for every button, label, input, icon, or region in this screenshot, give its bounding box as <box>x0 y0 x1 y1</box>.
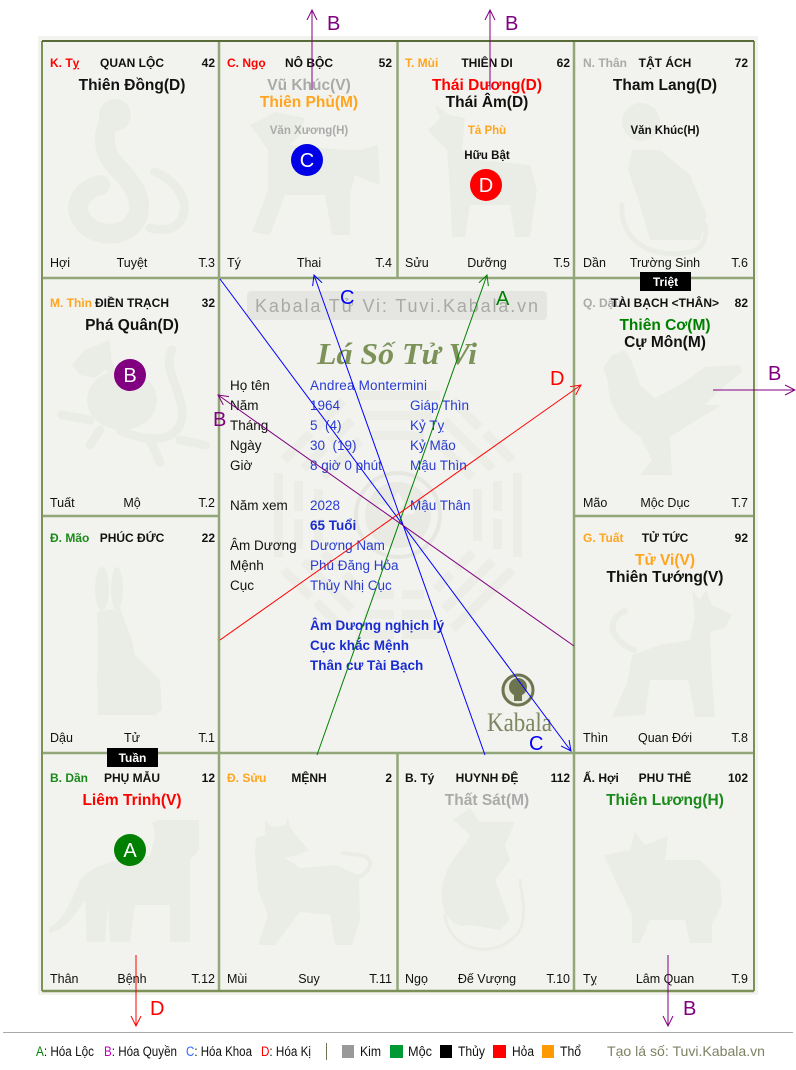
footer divider <box>3 1032 793 1033</box>
icon: horse <box>250 112 380 235</box>
panel: personal information: Ngày <box>230 438 262 453</box>
banner: site name: Kabala Tử Vi: Tuvi.Kabala.vn <box>255 296 538 316</box>
palace: Thiên Di: Tả Phù <box>468 125 506 137</box>
palace: Tài Bạch: 82 <box>735 296 748 310</box>
palace: Tật Ách: TẬT ÁCH <box>639 55 691 70</box>
icon: rat <box>442 808 524 949</box>
palace: Điền Trạch: M. Thìn <box>50 296 92 310</box>
palace: Phúc Đức: Dậu <box>50 731 73 745</box>
letter B: B <box>213 409 226 431</box>
palace: Tật Ách: T.6 <box>731 256 748 270</box>
palace: Tử Tức: Quan Đới <box>638 731 692 745</box>
panel: personal information: Cục <box>230 578 254 593</box>
palace: Phụ Mẫu: PHỤ MẪU <box>104 770 160 785</box>
palace: Quan Lộc: T.3 <box>198 256 215 270</box>
arrow: B top left <box>311 10 313 90</box>
palace: Huynh Đệ <box>405 770 570 986</box>
palace: Thiên Di: Hữu Bật <box>464 150 510 162</box>
palace: Huynh Đệ: T.10 <box>546 972 570 986</box>
arrow letters <box>150 13 781 1020</box>
palace: Huynh Đệ: B. Tý <box>405 771 435 785</box>
palace: Phụ Mẫu: T.12 <box>191 972 215 986</box>
palace: Nô Bộc: Vũ Khúc(V) <box>267 77 351 94</box>
panel: personal information: 65 Tuổi <box>310 518 356 533</box>
panel: personal information: Thân cư Tài Bạch <box>310 658 423 673</box>
palace: Tử Tức: 92 <box>735 531 748 545</box>
palace: Nô Bộc: NÔ BỘC <box>285 55 333 70</box>
palace: Phụ Mẫu: B. Dần <box>50 771 88 785</box>
palace: Nô Bộc: Thiên Phủ(M) <box>260 94 358 111</box>
marker: D: D <box>479 175 493 197</box>
title: Lá Số Tử Vi: Lá Số Tử Vi <box>316 336 477 371</box>
icon: rooster <box>603 350 742 475</box>
panel: personal information: Tháng <box>230 418 268 433</box>
palace: Phúc Đức: T.1 <box>198 731 215 745</box>
panel: personal information: 30 (19) <box>310 438 357 453</box>
chart grid <box>42 41 754 991</box>
palace: Nô Bộc: T.4 <box>375 256 392 270</box>
palace: Mệnh: T.11 <box>369 972 392 986</box>
icon: bagua watermark <box>274 391 522 639</box>
legend: transformations: B: Hóa Quyền <box>104 1044 177 1059</box>
panel: personal information: Âm Dương nghịch lý <box>310 618 445 633</box>
panel: personal information: Mậu Thìn <box>410 458 467 473</box>
panel: personal information: Phú Đăng Hỏa <box>310 558 399 573</box>
palace: Tài Bạch: Mộc Dục <box>640 496 690 510</box>
letter D: D <box>150 998 164 1020</box>
footer link text: Tạo lá số: Tuvi.Kabala.vn <box>607 1043 765 1059</box>
panel: personal information <box>230 378 471 673</box>
letter D: D <box>550 368 564 390</box>
panel: personal information: Dương Nam <box>310 538 385 553</box>
palace: Tật Ách: Dần <box>583 256 606 270</box>
palace: Phu Thê: T.9 <box>731 972 748 986</box>
panel: personal information: Mậu Thân <box>410 498 471 513</box>
marker: A <box>114 834 146 866</box>
palace: Tử Tức: Thiên Tướng(V) <box>607 569 723 586</box>
panel: personal information: Kỷ Tỵ <box>410 418 445 433</box>
palace: Phụ Mẫu: Thân <box>50 972 79 986</box>
palace: Điền Trạch: Phá Quân(D) <box>85 317 179 334</box>
palace: Quan Lộc: K. Tỵ <box>50 56 80 70</box>
palace: Phúc Đức: 22 <box>202 531 215 545</box>
palace: Tật Ách: N. Thân <box>583 56 627 70</box>
icon: pig <box>604 832 722 943</box>
letter C: C <box>340 287 354 309</box>
palace: Phụ Mẫu: 12 <box>202 771 215 785</box>
marker: A: A <box>123 840 137 862</box>
letter B: B <box>768 363 781 385</box>
palace: Điền Trạch <box>50 295 215 510</box>
palace: Tật Ách: 72 <box>735 56 748 70</box>
panel: personal information: 2028 <box>310 498 340 513</box>
palace: Nô Bộc: Văn Xương(H) <box>270 125 348 137</box>
palace: Thiên Di: Sửu <box>405 256 429 270</box>
palace: Nô Bộc: Thai <box>297 256 321 270</box>
legend separator <box>326 1043 327 1060</box>
badge: Triệt <box>640 272 691 291</box>
palace: Thiên Di: 62 <box>557 56 570 70</box>
marker: B: B <box>123 365 137 387</box>
panel: personal information: Năm xem <box>230 498 288 513</box>
palace: Huynh Đệ: 112 <box>551 771 570 785</box>
panel: personal information: Giờ <box>230 458 252 473</box>
arrow: A <box>317 275 487 755</box>
palace: Mệnh <box>227 770 392 986</box>
badge: Tuần: Tuần <box>119 751 146 765</box>
palace: Quan Lộc: Tuyệt <box>117 256 148 270</box>
letter B: B <box>327 13 340 35</box>
legend: transformations: C: Hóa Khoa <box>186 1044 252 1059</box>
arrow: B diagonal <box>218 395 574 646</box>
palace: Mệnh: MỆNH <box>291 770 327 785</box>
icon: ox <box>255 817 370 945</box>
legend: elements: Thổ <box>560 1044 581 1059</box>
marker: D <box>470 169 502 201</box>
palace: Tài Bạch: Mão <box>583 496 607 510</box>
badge: Tuần <box>107 748 158 767</box>
palace: Thiên Di: Thái Dương(D) <box>432 77 542 94</box>
palace: Phu Thê: Ấ. Hợi <box>583 770 619 785</box>
icon: monkey <box>622 103 707 254</box>
palace: Điền Trạch: Mộ <box>123 496 141 510</box>
palace: Huynh Đệ: Thất Sát(M) <box>445 792 529 809</box>
palace: Tử Tức <box>583 530 748 745</box>
palace: Nô Bộc: 52 <box>379 56 392 70</box>
panel: personal information: 1964 <box>310 398 341 413</box>
palace: Phụ Mẫu: Liêm Trinh(V) <box>82 792 182 809</box>
panel: personal information: Thủy Nhị Cục <box>310 578 392 593</box>
arrow: D <box>220 385 581 640</box>
arrow: B top right <box>489 10 491 90</box>
palace: Nô Bộc: Tý <box>227 256 242 270</box>
palace: Quan Lộc: Hợi <box>50 256 70 270</box>
arrow: D bottom <box>135 955 137 1026</box>
palace: Tử Tức: Thìn <box>583 731 608 745</box>
palace: Tài Bạch: Thiên Cơ(M) <box>619 317 711 334</box>
panel: personal information: Mệnh <box>230 558 264 573</box>
panel: personal information: Giáp Thìn <box>410 398 469 413</box>
palace: Phụ Mẫu <box>50 770 215 986</box>
legend: transformations <box>36 1044 311 1059</box>
marker: B <box>114 359 146 391</box>
banner: site name <box>247 291 547 320</box>
palace: Tài Bạch: Q. Dậu <box>583 296 622 310</box>
palace: Tài Bạch: TÀI BẠCH <THÂN> <box>611 295 719 310</box>
icon: rabbit <box>95 567 162 715</box>
palace: Quan Lộc: QUAN LỘC <box>100 55 164 70</box>
panel: personal information: Họ tên <box>230 378 270 393</box>
panel: personal information: Âm Dương <box>230 538 297 553</box>
letter B: B <box>683 998 696 1020</box>
palace: Tử Tức: Tử Vi(V) <box>635 552 695 569</box>
palace: Phúc Đức <box>50 530 215 745</box>
palace: Tài Bạch: Cự Môn(M) <box>624 334 706 351</box>
palace: Phúc Đức: PHÚC ĐỨC <box>100 530 165 545</box>
palace: Thiên Di: T.5 <box>553 256 570 270</box>
palace: Điền Trạch: T.2 <box>198 496 215 510</box>
icon: dog <box>612 590 732 717</box>
arrow: C diagonal <box>220 279 571 751</box>
palace: Phu Thê: 102 <box>728 771 748 785</box>
arrows: star transformations <box>136 10 795 1026</box>
panel: personal information: Andrea Montermini <box>310 378 427 393</box>
panel: personal information: Cục khắc Mệnh <box>310 638 409 653</box>
palace: Phu Thê: Thiên Lương(H) <box>606 792 724 809</box>
palace: Điền Trạch: Tuất <box>50 496 75 510</box>
panel: personal information: Kỷ Mão <box>410 438 456 453</box>
palace: Quan Lộc <box>50 55 215 270</box>
palace: Phụ Mẫu: Bệnh <box>117 972 147 986</box>
palace: Tử Tức: TỬ TỨC <box>642 530 689 545</box>
palace: Điền Trạch: ĐIỀN TRẠCH <box>95 295 169 310</box>
palace: Tử Tức: T.8 <box>731 731 748 745</box>
marker: C <box>291 144 323 176</box>
arrow: B bottom <box>667 955 669 1026</box>
palace: Phu Thê: Tỵ <box>583 972 598 986</box>
palace: Tật Ách: Tham Lang(D) <box>613 77 717 94</box>
legend: elements: Hỏa <box>512 1044 534 1059</box>
letter C: C <box>529 733 543 755</box>
grid lines <box>42 41 754 991</box>
palace: Thiên Di <box>405 55 570 270</box>
palace: Tài Bạch <box>583 295 748 510</box>
palace: Quan Lộc: 42 <box>202 56 215 70</box>
palace: Huynh Đệ: Ngọ <box>405 972 428 986</box>
palace: Tử Tức: G. Tuất <box>583 531 623 545</box>
palace: Nô Bộc <box>227 55 392 270</box>
palace: Điền Trạch: 32 <box>202 296 215 310</box>
palace: Mệnh: Đ. Sửu <box>227 771 266 785</box>
palace: Phu Thê: PHU THÊ <box>639 770 691 785</box>
badge: Triệt: Triệt <box>653 275 678 289</box>
palace: Quan Lộc: Thiên Đồng(D) <box>79 77 185 94</box>
palace: Thiên Di: THIÊN DI <box>461 55 513 70</box>
palace: Mệnh: Mùi <box>227 972 247 986</box>
icon: tiger <box>49 820 199 942</box>
legend: elements: Thủy <box>458 1044 485 1059</box>
palace: Huynh Đệ: Đế Vượng <box>458 972 516 986</box>
icon: dragon <box>62 340 205 462</box>
panel: personal information: 5 (4) <box>310 418 342 433</box>
letter A: A <box>496 288 510 310</box>
panel: personal information: Năm <box>230 398 259 413</box>
palace: Tật Ách <box>583 55 748 270</box>
palace: Nô Bộc: C. Ngọ <box>227 56 266 70</box>
palace: Huynh Đệ: HUYNH ĐỆ <box>456 770 518 785</box>
palace: Thiên Di: Thái Âm(D) <box>446 93 528 111</box>
palace: Phu Thê <box>583 770 748 986</box>
legend: transformations: A: Hóa Lộc <box>36 1044 94 1059</box>
legend: elements: Kim <box>360 1044 381 1059</box>
logo: Kabala: Kabala <box>487 708 552 737</box>
palace: Mệnh: Suy <box>298 972 321 986</box>
palace: Thiên Di: Dưỡng <box>467 256 507 270</box>
legend: elements <box>342 1044 581 1059</box>
arrow: B right <box>713 389 795 391</box>
zodiac watermarks <box>49 99 742 949</box>
arrow: C <box>314 275 485 755</box>
legend: transformations: D: Hóa Kị <box>261 1044 311 1059</box>
legend: elements: Mộc <box>408 1044 432 1059</box>
palace: Phúc Đức: Đ. Mão <box>50 531 89 545</box>
letter B: B <box>505 13 518 35</box>
palace: Tài Bạch: T.7 <box>731 496 748 510</box>
panel: personal information: 8 giờ 0 phút <box>310 458 382 473</box>
palace: Tật Ách: Văn Khúc(H) <box>630 125 700 137</box>
palace: Phúc Đức: Tử <box>124 731 140 745</box>
palace: Mệnh: 2 <box>385 771 392 785</box>
palace: Phu Thê: Lâm Quan <box>636 972 694 986</box>
palace: Tật Ách: Trường Sinh <box>630 256 700 270</box>
logo: Kabala <box>487 675 552 737</box>
marker: C: C <box>300 150 314 172</box>
palace: Thiên Di: T. Mùi <box>405 56 438 70</box>
icon: goat <box>428 105 537 237</box>
icon: snake <box>78 99 184 234</box>
